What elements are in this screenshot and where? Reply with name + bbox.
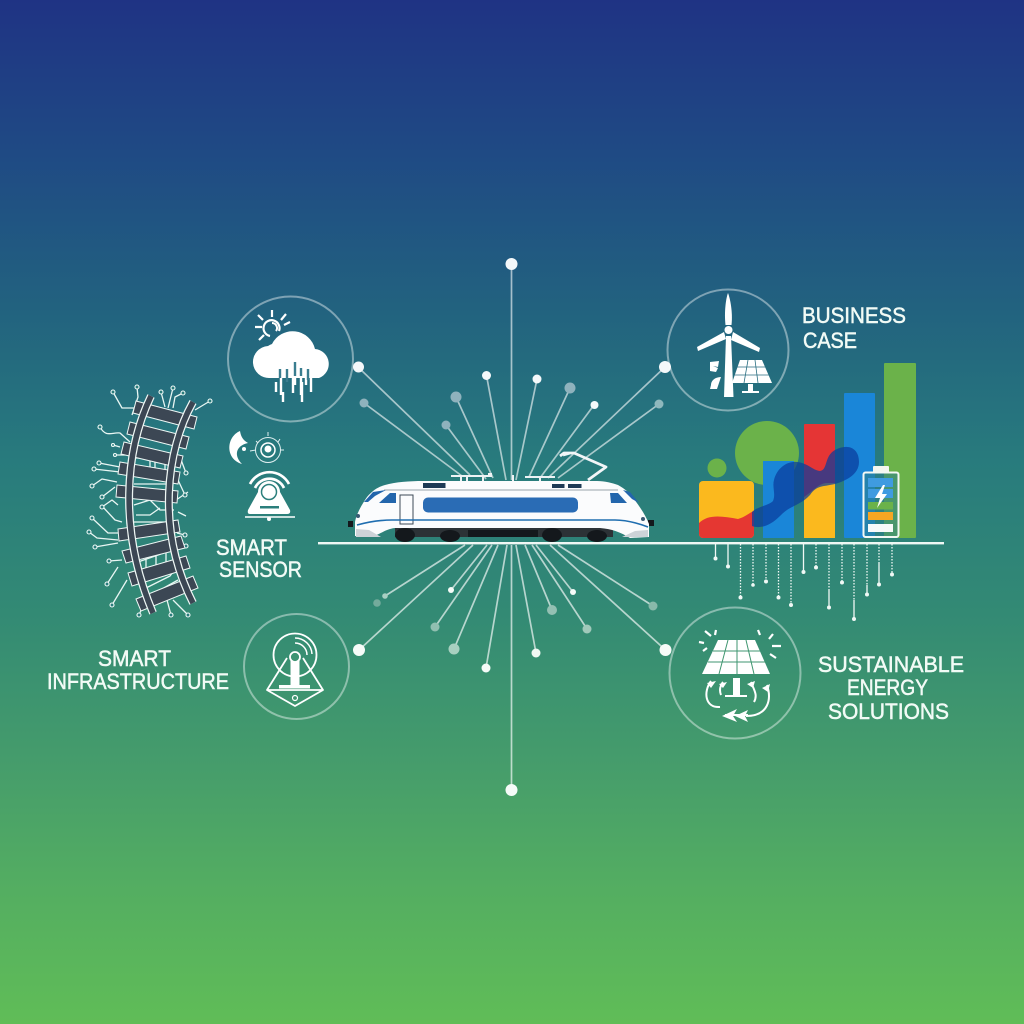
- data drip lines below chart: [714, 544, 894, 621]
- baseline track line: [318, 542, 944, 544]
- yellow block: [699, 481, 756, 540]
- icon: smart infrastructure in circle: [244, 614, 349, 719]
- icon: data bars: [276, 362, 311, 402]
- door: [400, 495, 413, 524]
- solar panel: [732, 360, 772, 393]
- circular arrows: [706, 681, 769, 716]
- radial connector lines and nodes: [353, 258, 672, 796]
- icon: solar panel with energy cycle in circle: [670, 608, 800, 738]
- decorative circles: [708, 458, 726, 478]
- pantograph: [560, 453, 606, 480]
- headlights: [356, 514, 360, 518]
- label: smart sensor: SMART: [216, 535, 287, 560]
- bar chart with battery: [699, 363, 916, 540]
- sun rays: [699, 630, 781, 658]
- smart railway track with circuit traces: [87, 385, 212, 617]
- label: smart sensor: [216, 535, 302, 582]
- icon: cloud with weather data in circle: [228, 296, 353, 422]
- livery stripe: [357, 520, 648, 527]
- label: business case: [802, 303, 906, 353]
- upper nodes: [353, 258, 671, 430]
- label: sustainable energy solutions: [818, 652, 964, 724]
- circuit traces: [89, 387, 210, 615]
- red and yellow bar: [804, 424, 835, 538]
- label: sustainable energy solutions: SOLUTIONS: [828, 699, 949, 724]
- upper rays: [358, 264, 665, 480]
- small devices: [710, 361, 721, 389]
- tall green bar: [884, 363, 916, 538]
- label: smart infrastructure: SMART: [98, 646, 171, 671]
- label: smart sensor: SENSOR: [219, 557, 302, 582]
- icon: wind turbine and solar panel in circle: [668, 290, 788, 410]
- window band: [423, 498, 578, 512]
- battery: [864, 466, 898, 537]
- body: [355, 481, 649, 538]
- train: [348, 453, 654, 542]
- icon: sun: [255, 310, 290, 340]
- dark wave overlay: [752, 447, 859, 527]
- roof equipment: [451, 474, 555, 481]
- label: sustainable energy solutions: ENERGY: [847, 675, 928, 700]
- label: business case: CASE: [803, 328, 857, 353]
- label: sustainable energy solutions: SUSTAINABLE: [818, 652, 964, 677]
- icon: small status symbols above sensor: [229, 431, 284, 464]
- rails: [129, 396, 193, 613]
- icon: cloud: [253, 331, 329, 378]
- cab windows: [379, 493, 396, 503]
- blue bar: [763, 461, 794, 538]
- tall blue bar: [844, 393, 875, 538]
- trace terminal pads: [87, 385, 212, 617]
- icon: smart sensor: [245, 472, 295, 521]
- lower nodes: [353, 587, 672, 796]
- couplers: [348, 521, 353, 527]
- label: smart infrastructure: [47, 646, 229, 694]
- sleepers: [116, 401, 198, 611]
- panel stand: [725, 678, 747, 697]
- turbine: [697, 293, 760, 397]
- wheels and underframe: [395, 527, 613, 537]
- lower rays: [359, 545, 666, 790]
- roof seam: [384, 489, 618, 491]
- windscreens: [364, 490, 386, 502]
- roof hatches: [423, 483, 446, 488]
- label: smart infrastructure: INFRASTRUCTURE: [47, 669, 229, 694]
- label: business case: BUSINESS: [802, 303, 906, 328]
- panel: [702, 640, 770, 674]
